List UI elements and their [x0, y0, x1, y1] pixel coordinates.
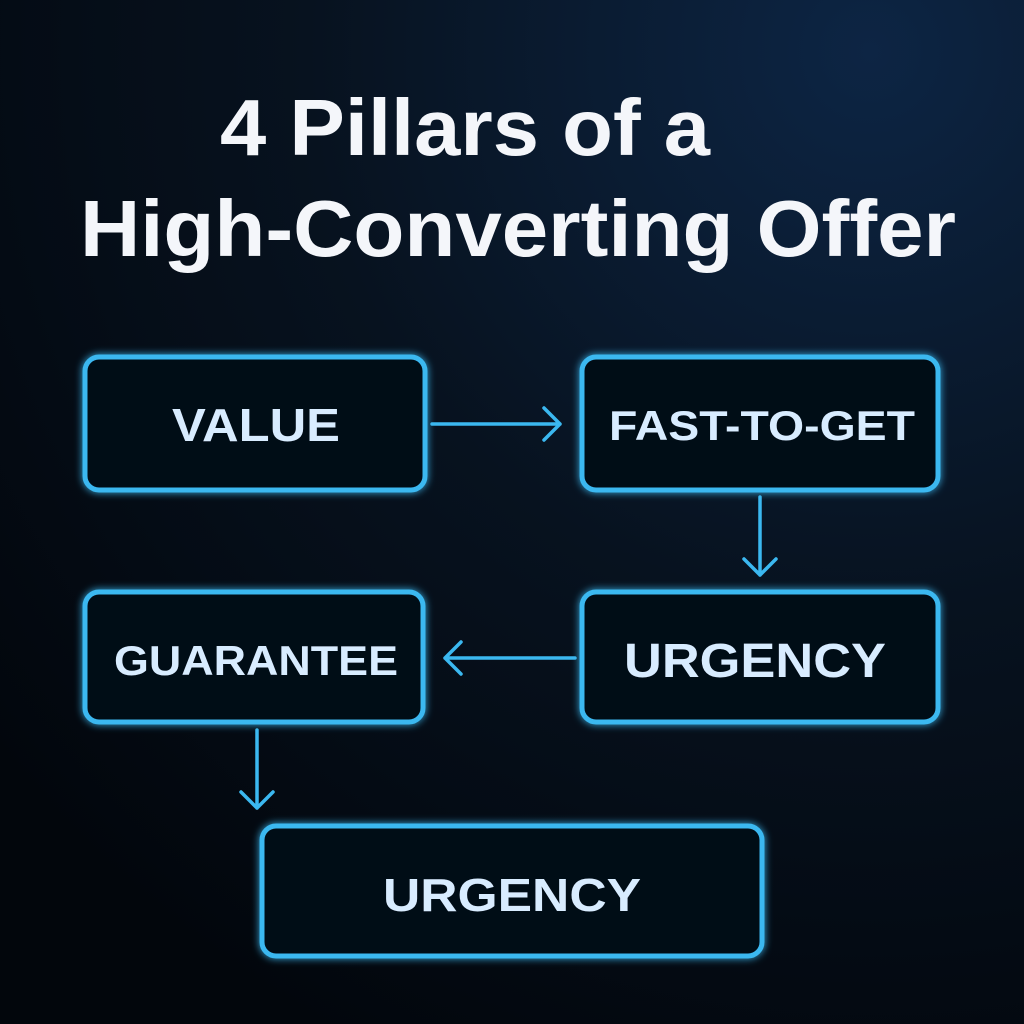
box: guarantee: GUARANTEE — [114, 637, 398, 684]
box: guarantee — [85, 592, 423, 722]
title: 4 Pillars of a — [220, 83, 711, 172]
arrow: value to fast — [432, 408, 560, 440]
box: urgency bottom: URGENCY — [383, 869, 641, 921]
arrow: fast to urgency — [744, 497, 776, 575]
box: value: VALUE — [172, 399, 340, 451]
arrow: urgency to guarantee — [445, 642, 575, 674]
box: urgency right — [582, 592, 938, 722]
box: fast-to-get: FAST-TO-GET — [609, 402, 915, 449]
box: urgency bottom — [262, 826, 762, 956]
title — [80, 83, 956, 273]
arrow: guarantee to urgency — [241, 730, 273, 808]
box: fast-to-get — [582, 357, 938, 490]
title: High-Converting Offer — [80, 184, 956, 273]
box: urgency right: URGENCY — [624, 635, 886, 688]
box: value — [85, 357, 425, 490]
